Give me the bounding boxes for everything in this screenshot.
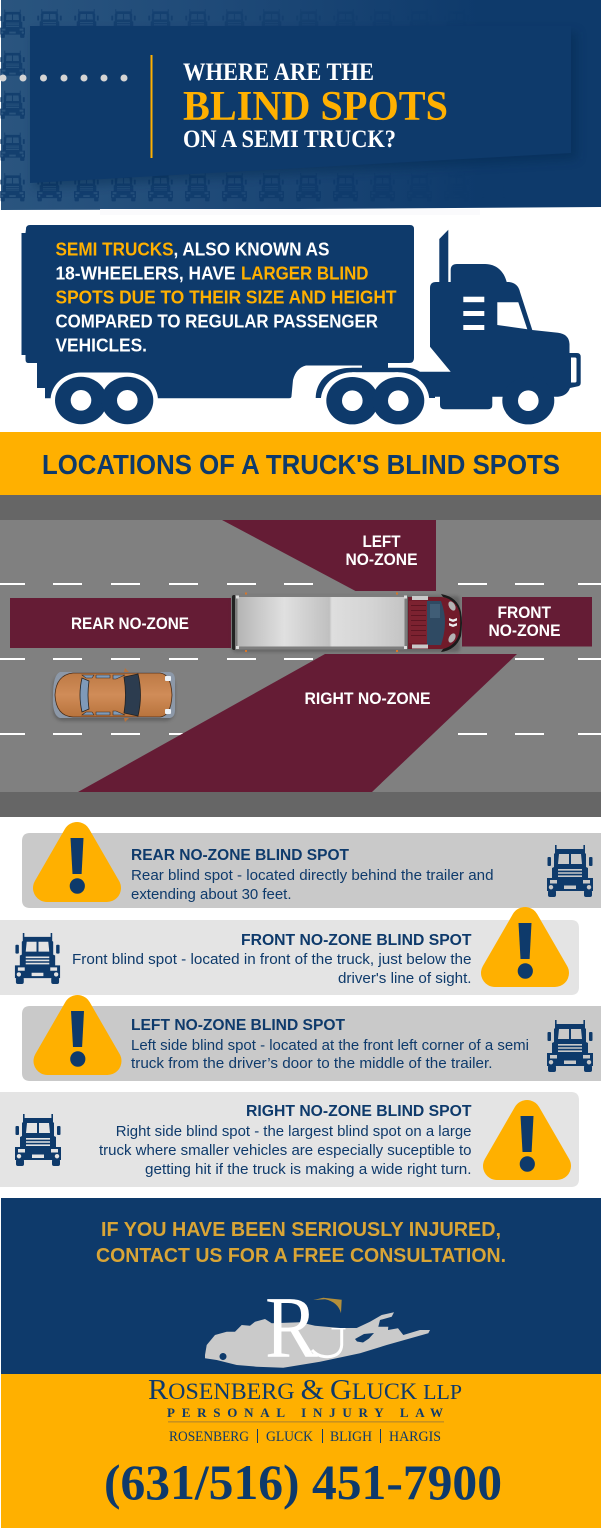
right no-zone: RIGHT NO-ZONE <box>304 690 430 708</box>
card: front no-zone: FRONT NO-ZONE BLIND SPOT <box>241 932 472 949</box>
truck tractor <box>316 230 581 409</box>
card: front no-zone <box>0 920 579 995</box>
intro text: LARGER BLIND <box>241 264 368 284</box>
section heading band <box>0 432 601 495</box>
card: right no-zone: Right side blind spot - the largest blind spot on a large <box>116 1123 471 1140</box>
title: BLIND SPOTS <box>183 84 448 130</box>
card: left no-zone <box>22 1006 601 1081</box>
wheels <box>55 377 554 424</box>
icon: warning <box>48 1009 108 1067</box>
title: WHERE ARE THE <box>183 59 374 86</box>
truck cab <box>408 597 462 649</box>
partner names: BLIGH <box>330 1429 372 1445</box>
partner names <box>169 1429 441 1445</box>
header background band <box>0 0 601 210</box>
intro text: VEHICLES. <box>56 336 147 356</box>
white wheel wells <box>50 372 435 429</box>
card: front no-zone: driver's line of sight. <box>338 970 472 987</box>
rear no-zone <box>10 598 231 648</box>
logo: long island with monogram <box>205 1280 430 1377</box>
header panel shadow <box>34 32 577 188</box>
front no-zone: FRONT <box>498 604 551 622</box>
truck icon pattern <box>0 9 506 201</box>
phone number: (631/516) 451-7900 <box>104 1454 502 1510</box>
tagline: PERSONAL INJURY LAW <box>167 1405 443 1420</box>
intro text: 18-WHEELERS, HAVE <box>56 264 236 284</box>
soft fade below header <box>100 209 480 215</box>
card: right no-zone: RIGHT NO-ZONE BLIND SPOT <box>246 1103 472 1120</box>
truck top view <box>232 592 462 652</box>
partner names: ROSENBERG <box>169 1429 249 1445</box>
icon: warning <box>497 1114 557 1172</box>
partner names: HARGIS <box>389 1429 441 1445</box>
illustration: semi truck side view with intro text <box>22 225 581 429</box>
intro text: SEMI TRUCKS <box>56 240 174 260</box>
icon: truck <box>15 1114 61 1166</box>
road diagram <box>0 495 601 817</box>
card: rear no-zone: Rear blind spot - located directly behind the trailer and <box>131 867 493 884</box>
front no-zone: NO-ZONE <box>488 622 560 640</box>
card: right no-zone: truck where smaller vehicles are especially suceptible to <box>99 1142 472 1159</box>
left no-zone: NO-ZONE <box>346 551 418 569</box>
partner names: GLUCK <box>266 1429 313 1445</box>
card: front no-zone: Front blind spot - located in front of the truck, just below the <box>72 951 472 968</box>
intro text <box>56 240 396 356</box>
dotted line <box>0 74 128 82</box>
card: left no-zone: truck from the driver’s door to the middle of the trailer. <box>131 1055 492 1072</box>
icon: warning <box>495 921 555 979</box>
cab window <box>497 302 527 329</box>
footer call to action panel <box>1 1198 601 1377</box>
left no-zone <box>222 520 436 591</box>
icon: truck <box>547 1020 593 1072</box>
icon: truck <box>547 845 593 897</box>
card: rear no-zone: REAR NO-ZONE BLIND SPOT <box>131 847 349 864</box>
rear no-zone: REAR NO-ZONE <box>71 615 189 633</box>
card: rear no-zone <box>22 833 601 908</box>
intro text: , ALSO KNOWN AS <box>174 240 330 260</box>
truck trailer <box>22 225 414 398</box>
title: ON A SEMI TRUCK? <box>183 126 396 153</box>
card: left no-zone: Left side blind spot - located at the front left corner of a semi <box>131 1037 529 1054</box>
card: rear no-zone: extending about 30 feet. <box>131 886 292 903</box>
card: right no-zone <box>0 1092 579 1187</box>
header panel <box>0 26 571 183</box>
front no-zone <box>462 597 592 646</box>
footer call to action panel: IF YOU HAVE BEEN SERIOUSLY INJURED, <box>101 1219 501 1241</box>
right no-zone <box>78 654 517 792</box>
section heading band: LOCATIONS OF A TRUCK'S BLIND SPOTS <box>42 449 560 480</box>
card: right no-zone: getting hit if the truck is making a wide right turn. <box>145 1161 472 1178</box>
intro text: COMPARED TO REGULAR PASSENGER <box>56 312 378 332</box>
logo: long island with monogram: R <box>265 1280 318 1377</box>
cab vents <box>463 297 484 302</box>
icon: truck <box>15 933 60 984</box>
icon: warning <box>47 836 107 894</box>
left no-zone: LEFT <box>362 533 400 551</box>
car top view <box>53 668 175 722</box>
footer call to action panel: CONTACT US FOR A FREE CONSULTATION. <box>96 1245 506 1267</box>
vertical divider <box>150 55 152 158</box>
firm name: ROSENBERG & GLUCK LLP <box>148 1374 462 1406</box>
title <box>183 59 448 153</box>
intro text: SPOTS DUE TO THEIR SIZE AND HEIGHT <box>56 288 396 308</box>
card: left no-zone: LEFT NO-ZONE BLIND SPOT <box>131 1017 345 1034</box>
footer contact panel <box>1 1374 601 1528</box>
